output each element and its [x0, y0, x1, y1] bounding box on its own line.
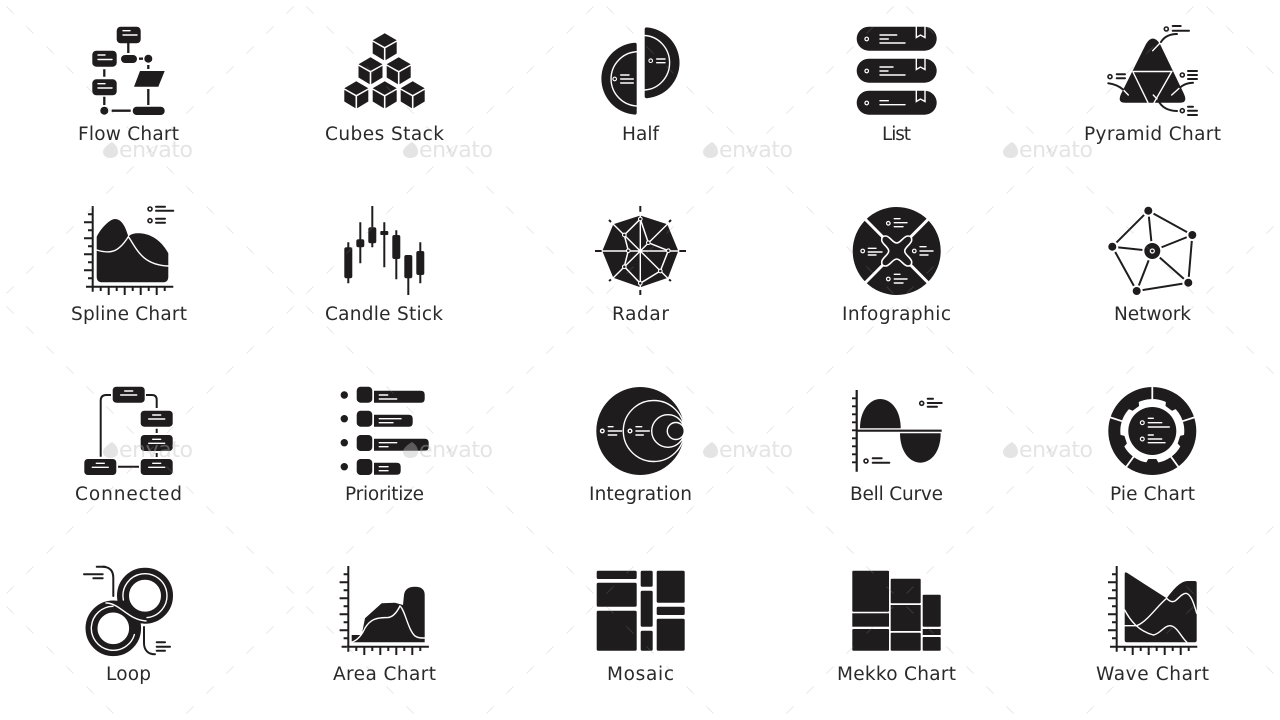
icon: radar: [595, 206, 686, 295]
label: List: List: [882, 124, 911, 145]
icon: network: [1106, 205, 1198, 297]
panel: Half: [601, 27, 680, 145]
icon: pie chart: [1108, 386, 1196, 475]
label: Cubes Stack: Cubes Stack: [325, 124, 444, 145]
label: Spline Chart: Spline Chart: [71, 304, 187, 325]
panel: Mekko Chart: [837, 571, 956, 685]
label: Connected: Connected: [75, 484, 182, 505]
panel: Candle Stick: [325, 206, 443, 325]
icon: candle stick: [344, 206, 424, 295]
panel: Pyramid Chart: [1084, 26, 1221, 145]
panel: List: [857, 27, 937, 145]
label: Loop: Loop: [106, 664, 151, 685]
panel: Mosaic: [597, 571, 685, 685]
panel: Cubes Stack: [325, 33, 444, 145]
icon: cubes stack: [344, 33, 425, 108]
watermark row 1: envato: [419, 138, 493, 163]
panel: Network: [1106, 205, 1198, 325]
icon: area chart: [340, 566, 429, 655]
label: Half: Half: [622, 124, 659, 145]
watermark row 3: envato: [419, 438, 493, 463]
watermark row 3: envato: [1019, 438, 1093, 463]
panel: Integration: [589, 387, 692, 505]
label: Wave Chart: Wave Chart: [1096, 664, 1209, 685]
icon: half circles: [601, 27, 680, 115]
watermark row 3: [103, 438, 1093, 463]
label: Prioritize: Prioritize: [345, 484, 424, 505]
label: Network: Network: [1114, 304, 1191, 325]
icon: flow chart: [92, 27, 165, 115]
label: Mosaic: Mosaic: [607, 664, 674, 685]
icon: integration circles: [596, 387, 684, 475]
panel: Pie Chart: [1108, 386, 1196, 505]
icon: spline chart: [84, 206, 173, 295]
panel: Loop: [84, 567, 170, 685]
panel: Flow Chart: [78, 27, 179, 145]
label: Bell Curve: Bell Curve: [850, 484, 943, 505]
panel: Radar: [595, 206, 686, 325]
label: Integration: Integration: [589, 484, 692, 505]
label: Pie Chart: Pie Chart: [1110, 484, 1195, 505]
panel: Bell Curve: [850, 390, 943, 505]
label: Candle Stick: Candle Stick: [325, 304, 443, 325]
icon: infographic: [853, 207, 941, 295]
watermark row 3: envato: [119, 438, 193, 463]
label: Area Chart: Area Chart: [333, 664, 436, 685]
icon: bell curve: [852, 390, 942, 472]
icon: list: [857, 27, 937, 115]
watermark row 1: envato: [119, 138, 193, 163]
label: Pyramid Chart: Pyramid Chart: [1084, 124, 1221, 145]
icon: pyramid chart: [1108, 26, 1197, 115]
panel: Prioritize: [341, 387, 429, 505]
icon: wave chart: [1108, 566, 1197, 655]
label: Flow Chart: Flow Chart: [78, 124, 179, 145]
icon: mosaic: [597, 571, 685, 651]
label: Infographic: Infographic: [842, 304, 951, 325]
panel: Spline Chart: [71, 206, 187, 325]
icon: loop: [84, 567, 170, 654]
icon: mekko chart: [852, 571, 941, 651]
watermark row 1: envato: [719, 138, 793, 163]
panel: Connected: [75, 387, 182, 505]
watermark row 1: [103, 138, 1093, 163]
panel: Infographic: [842, 207, 951, 325]
panel: Wave Chart: [1096, 566, 1209, 685]
label: Radar: Radar: [612, 304, 669, 325]
watermark row 3: envato: [719, 438, 793, 463]
watermark row 1: envato: [1019, 138, 1093, 163]
label: Mekko Chart: Mekko Chart: [837, 664, 956, 685]
panel: Area Chart: [333, 566, 436, 685]
icon: prioritize list: [341, 387, 429, 475]
icon: connected boxes: [84, 387, 173, 475]
